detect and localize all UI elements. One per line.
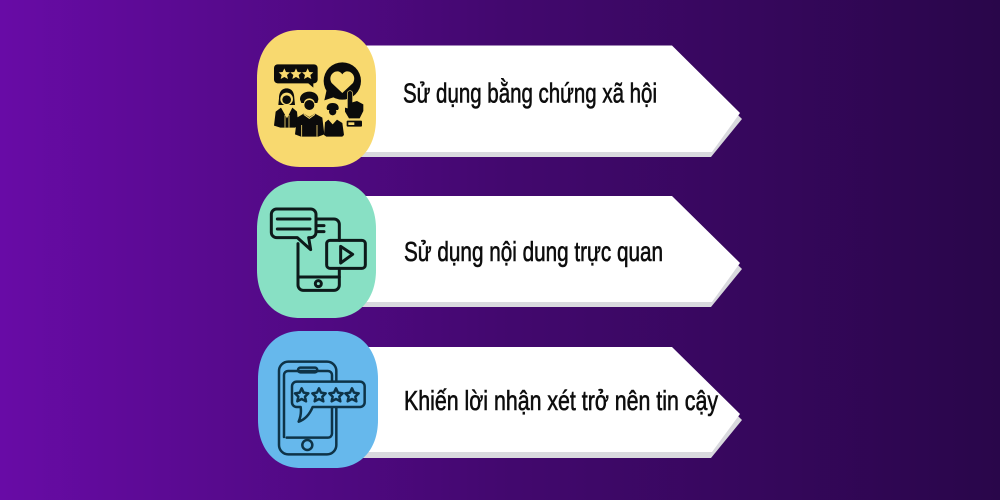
icon: phone with star rating (279, 362, 365, 454)
heading 2: Sử dụng nội dung trực quan (404, 236, 663, 267)
heading 3: Khiến lời nhận xét trở nên tin cậy (404, 385, 718, 416)
icon tile 3 (258, 331, 378, 468)
arrow panel 2 (355, 196, 742, 307)
heading 1: Sử dụng bằng chứng xã hội (403, 78, 657, 108)
arrow panel 1 (355, 46, 742, 157)
icon tile 1 (257, 30, 376, 167)
row 3: trustworthy reviews (258, 331, 742, 468)
row 2: visual content (257, 181, 742, 318)
arrow panel 3 (355, 347, 742, 458)
icon: phone with chat and video (271, 209, 365, 290)
icon: reviews and people (274, 62, 363, 137)
icon tile 2 (257, 181, 376, 318)
row 1: social proof (257, 30, 742, 167)
